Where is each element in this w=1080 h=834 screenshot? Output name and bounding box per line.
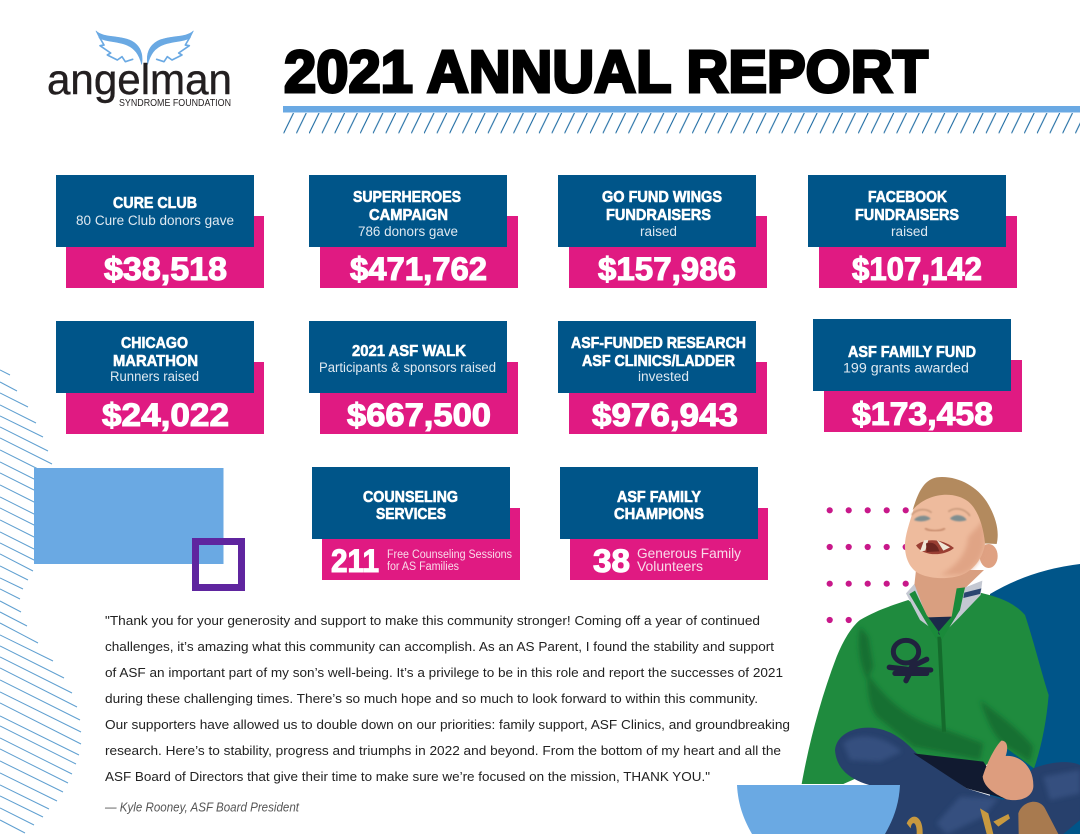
jeans (835, 728, 1080, 834)
panel: ASF Family Champions: ASF FAMILY (617, 489, 702, 506)
shape: purple square outline (196, 542, 242, 588)
hand (983, 741, 1033, 800)
panel: Facebook Fundraisers: raised (891, 224, 928, 239)
panel: Go Fund Wings Fundraisers: FUNDRAISERS (606, 207, 711, 224)
shape: navy circle (990, 564, 1080, 834)
panel: Go Fund Wings Fundraisers: GO FUND WINGS (602, 189, 722, 206)
title underline bar (283, 106, 1080, 112)
panel: 2021 ASF Walk (309, 321, 518, 434)
hair (913, 477, 998, 544)
decorative dots (827, 507, 909, 623)
panel: Facebook Fundraisers: FUNDRAISERS (855, 207, 959, 224)
panel: ASF Family Fund: $173,458 (852, 396, 993, 432)
logo subtitle: SYNDROME FOUNDATION (119, 98, 231, 109)
panel: Counseling Services: COUNSELING (363, 489, 458, 506)
quote text block: Our supporters have allowed us to double down on our priorities: family support, ASF Clinics, and groundbreaking (105, 717, 790, 732)
panel: Go Fund Wings Fundraisers: $157,986 (598, 251, 736, 287)
panel: Cure Club: 80 Cure Club donors gave (76, 213, 234, 228)
panel: 2021 ASF Walk: 2021 ASF WALK (352, 343, 467, 360)
panel: ASF-Funded Research: ASF-FUNDED RESEARCH (571, 335, 746, 352)
panel: 2021 ASF Walk: Participants & sponsors raised (319, 360, 496, 375)
panel: Chicago Marathon: CHICAGO (121, 335, 188, 352)
quote text block: "Thank you for your generosity and support to make this community stronger! Coming off a year of continued (105, 613, 760, 628)
jacket shading (859, 627, 1033, 762)
quote text block: ASF Board of Directors that give their time to make sure we’re focused on the mission, THANK YOU." (105, 769, 710, 784)
panel: Facebook Fundraisers (808, 175, 1017, 288)
quote text block: of ASF an important part of my son’s well-being. It’s a privilege to be in this role and report the successes of 2021 (105, 665, 783, 680)
panel: ASF Family Champions: 38 (593, 543, 630, 579)
panel: ASF-Funded Research: $976,943 (592, 397, 738, 433)
eyes and brows (912, 509, 970, 521)
panel: Go Fund Wings Fundraisers: raised (640, 224, 677, 239)
quote text block (105, 613, 790, 784)
panel: ASF Family Champions: CHAMPIONS (614, 506, 704, 523)
panel: ASF Family Champions: Generous Family (637, 545, 741, 561)
panel: Superheroes Campaign: SUPERHEROES (353, 189, 461, 206)
panel: Superheroes Campaign: CAMPAIGN (369, 207, 448, 224)
logo wordmark: angelman (47, 56, 232, 104)
panel: ASF Family Fund: 199 grants awarded (843, 360, 969, 376)
collar (906, 581, 982, 633)
panel: Counseling Services: SERVICES (376, 506, 446, 523)
panel: ASF-Funded Research: invested (638, 369, 689, 384)
decorative stripes: left edge (0, 370, 81, 833)
attribution: — Kyle Rooney, ASF Board President (104, 800, 299, 814)
panel: Chicago Marathon (56, 321, 264, 434)
shirt (927, 617, 952, 635)
panel: ASF Family Fund: ASF FAMILY FUND (848, 344, 976, 361)
dark gap under jacket (913, 753, 1010, 800)
panel: Cure Club (56, 175, 264, 288)
logo: Angelman Syndrome Foundation (47, 31, 232, 109)
jeans highlights (843, 736, 1080, 834)
panel: Counseling Services: 211 (331, 543, 379, 579)
quote text block: challenges, it’s amazing what this community can accomplish. As an AS Parent, I found the stability and support (105, 639, 774, 654)
panel: Chicago Marathon: Runners raised (110, 369, 199, 384)
panel: Superheroes Campaign: $471,762 (350, 251, 487, 287)
panel: Cure Club: CURE CLUB (113, 195, 197, 212)
panel: Chicago Marathon: MARATHON (113, 353, 198, 370)
shoes and laces (1018, 802, 1058, 834)
decorative ticks (284, 113, 1080, 134)
panel: ASF Family Champions: Volunteers (637, 558, 703, 574)
title: 2021 ANNUAL REPORT (284, 39, 928, 105)
panel: Go Fund Wings Fundraisers (558, 175, 767, 288)
panel: Superheroes Campaign (309, 175, 518, 288)
panel: Cure Club: $38,518 (104, 251, 227, 287)
panel: ASF-Funded Research: ASF CLINICS/LADDER (582, 353, 735, 370)
quote text block: during these challenging times. There’s so much hope and so much to look forward to within this community. (105, 691, 758, 706)
face shading (940, 520, 985, 575)
jacket zipper (939, 637, 944, 732)
panel: Superheroes Campaign: 786 donors gave (358, 224, 458, 239)
ear (980, 544, 998, 568)
panel: Counseling Services: Free Counseling Sessions (387, 549, 512, 561)
shape: light blue rectangle (34, 468, 224, 564)
panel: ASF Family Champions (560, 467, 768, 580)
shape: light blue half circle (737, 785, 900, 834)
panel: Chicago Marathon: $24,022 (102, 397, 229, 433)
jacket chest logo (889, 640, 931, 681)
panel: Facebook Fundraisers: $107,142 (852, 251, 982, 287)
nose (925, 528, 945, 531)
head (905, 488, 986, 578)
neck (914, 570, 984, 617)
panel: ASF-Funded Research (558, 321, 767, 434)
photo illustration: laughing boy in green jacket (802, 477, 1080, 834)
panel: Counseling Services (312, 467, 520, 580)
panel: ASF Family Fund (813, 319, 1022, 432)
icon: angel wings (96, 31, 193, 64)
panel: Facebook Fundraisers: FACEBOOK (868, 189, 948, 206)
mouth (916, 540, 954, 554)
panel: Counseling Services: for AS Families (387, 561, 459, 573)
panel: 2021 ASF Walk: $667,500 (347, 397, 491, 433)
quote text block: research. Here’s to stability, progress and triumphs in 2022 and beyond. From the bottom of my heart and all the (105, 743, 781, 758)
jacket (802, 593, 1049, 784)
